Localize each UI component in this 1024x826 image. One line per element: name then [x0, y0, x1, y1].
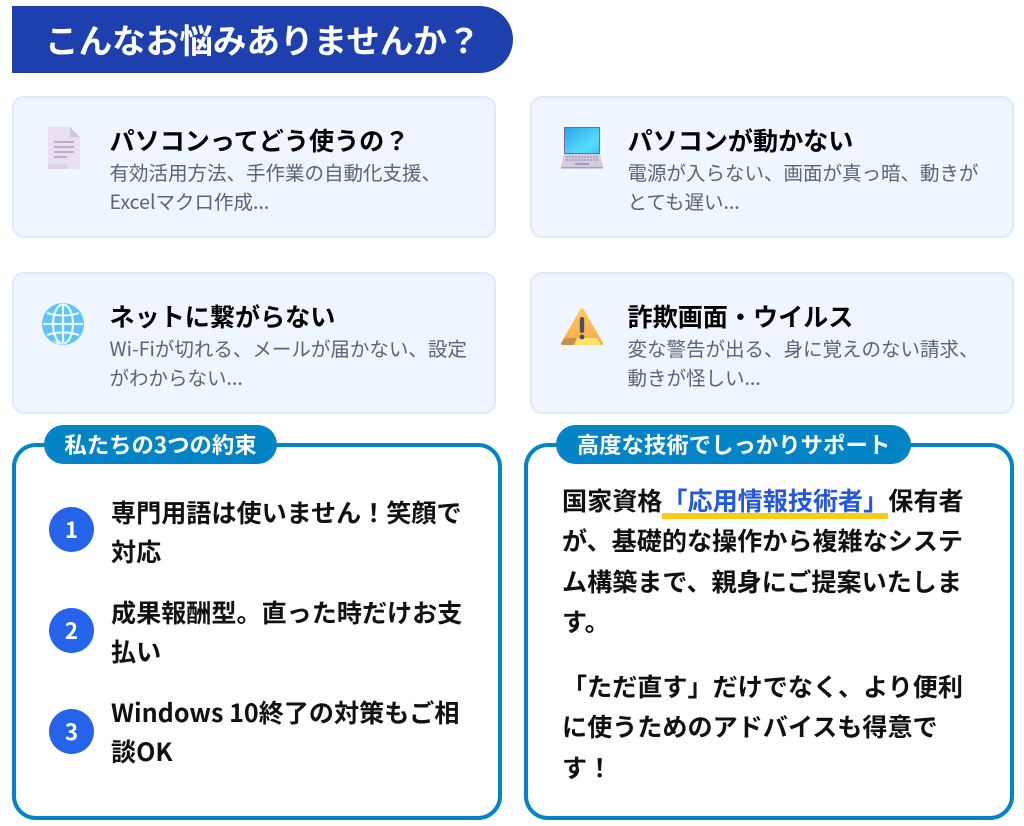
card description: がわからない...: [110, 362, 243, 390]
paragraph 1: す。: [562, 603, 610, 639]
paragraph 1: が、基礎的な操作から複雑なシステ: [562, 522, 963, 558]
icon: warning triangle: [561, 308, 603, 345]
card heading: ネットに繋がらない: [110, 298, 335, 334]
panel heading: three promises: [44, 425, 277, 464]
card description: [110, 156, 441, 214]
promise 3 text: 談OK: [111, 733, 173, 769]
promise 3 text: [111, 694, 459, 769]
panel heading: three promises: 私たちの3つの約束: [64, 428, 257, 460]
number badge 2: 2: [65, 614, 78, 646]
promise 3 text: Windows 10終了の対策もご相: [111, 694, 459, 730]
paragraph 2: 「ただ直す」だけでなく、より便利: [562, 668, 963, 704]
promise 1 text: 専門用語は使いません！笑顔で: [111, 494, 462, 530]
number badge 3: [49, 709, 94, 754]
icon: laptop: [561, 127, 603, 168]
card heading: 詐欺画面・ウイルス: [628, 298, 853, 334]
promise 2 text: 成果報酬型。直った時だけお支: [111, 594, 462, 630]
panel: how to use a PC: [12, 96, 496, 238]
card heading: パソコンってどう使うの？: [110, 122, 409, 158]
promise 2 text: 払い: [111, 633, 161, 669]
card heading: パソコンが動かない: [628, 122, 853, 158]
paragraph 1: 国家資格「応用情報技術者」保有者: [562, 482, 964, 518]
number badge 1: 1: [65, 513, 78, 545]
promise 2 text: [111, 594, 462, 669]
number badge 1: [49, 507, 94, 552]
panel: PC won't start: [530, 96, 1014, 238]
paragraph 2: に使うためのアドバイスも得意で: [562, 708, 938, 744]
panel: three promises frame: [12, 442, 502, 820]
card description: Excelマクロ作成...: [110, 186, 269, 214]
card description: [628, 332, 979, 390]
icon: globe: [42, 303, 84, 345]
panel: no network: [12, 272, 496, 414]
promise 1 text: 対応: [111, 533, 161, 569]
paragraph 2: [562, 668, 963, 784]
title banner: [12, 6, 513, 73]
paragraph 1: ム構築まで、親身にご提案いたしま: [562, 562, 962, 598]
number badge 3: 3: [65, 715, 78, 747]
number badge 2: [49, 608, 94, 653]
card description: [110, 332, 467, 390]
panel: technical support frame: [524, 442, 1014, 820]
card description: [628, 156, 979, 214]
promise 1 text: [111, 494, 462, 569]
panel heading: technical support: 高度な技術でしっかりサポート: [577, 428, 890, 460]
card description: 変な警告が出る、身に覚えのない請求、: [628, 332, 979, 362]
panel: scam screens and viruses: [530, 272, 1014, 414]
card description: Wi-Fiが切れる、メールが届かない、設定: [110, 332, 467, 362]
card description: 電源が入らない、画面が真っ暗、動きが: [628, 156, 979, 186]
card description: とても遅い...: [628, 186, 740, 214]
card description: 動きが怪しい...: [628, 362, 761, 390]
highlight underline: [662, 513, 888, 518]
paragraph 1: [562, 482, 964, 639]
paragraph 2: す！: [562, 748, 612, 784]
icon: document: [48, 127, 80, 169]
card description: 有効活用方法、手作業の自動化支援、: [110, 156, 441, 186]
title text: こんなお悩みありませんか？: [45, 14, 481, 63]
